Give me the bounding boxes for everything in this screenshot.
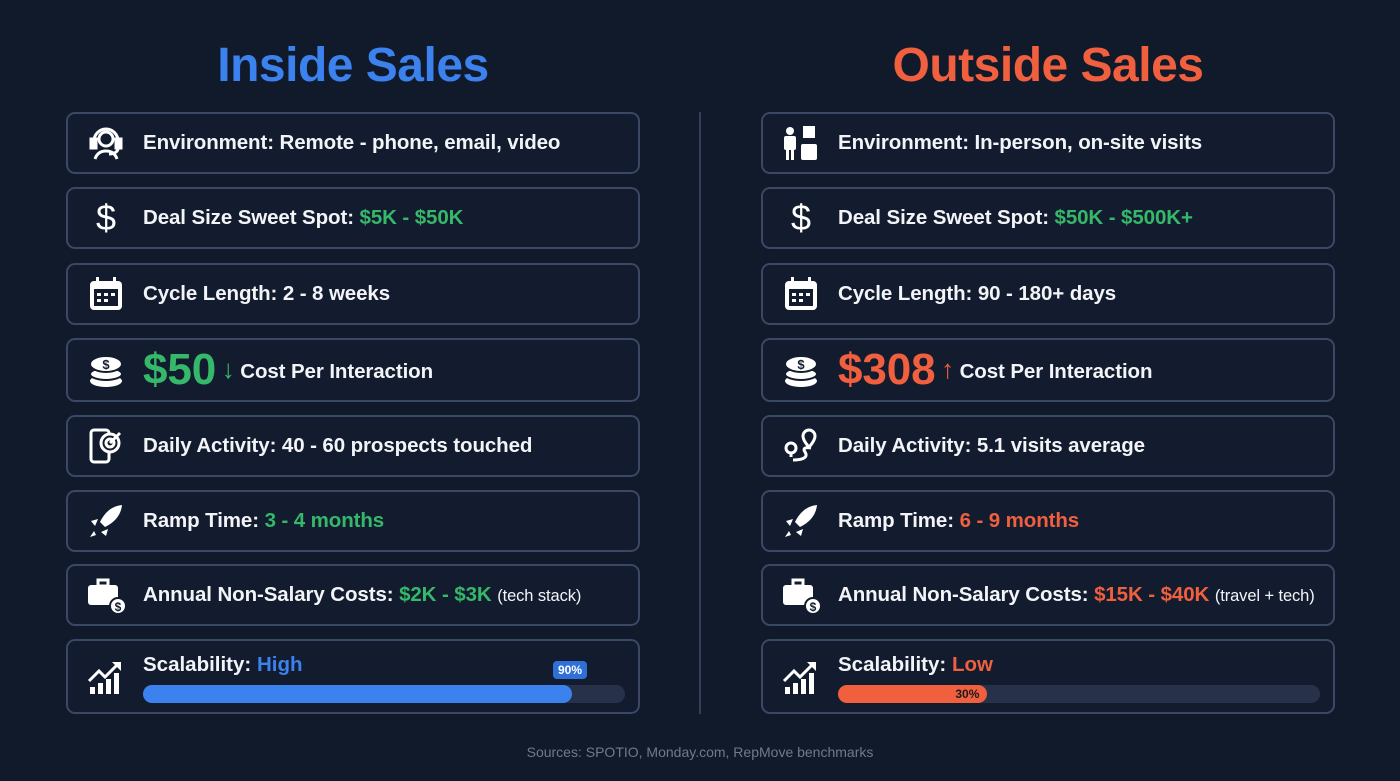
icon: briefcase bbox=[783, 578, 820, 614]
text: Ramp Time: 3 - 4 months bbox=[143, 509, 384, 532]
card: daily activity bbox=[761, 415, 1335, 477]
divider bbox=[699, 112, 701, 714]
label: Scalability: Low bbox=[838, 653, 993, 676]
icon: headset bbox=[90, 128, 122, 160]
card: environment bbox=[761, 112, 1335, 174]
label: Scalability: High bbox=[143, 653, 302, 676]
icon: briefcase: $ bbox=[810, 600, 817, 614]
card: environment bbox=[66, 112, 640, 174]
text: $50 ↓ Cost Per Interaction bbox=[143, 345, 433, 394]
text: Deal Size Sweet Spot: $5K - $50K bbox=[143, 206, 463, 229]
icon: briefcase bbox=[88, 578, 125, 614]
icon: briefcase: $ bbox=[115, 600, 122, 614]
text: Daily Activity: 40 - 60 prospects touched bbox=[143, 434, 532, 457]
title: outside sales: Outside Sales bbox=[893, 39, 1203, 92]
icon: calendar bbox=[785, 277, 817, 310]
icon: route pin bbox=[784, 428, 816, 462]
card: costs bbox=[66, 564, 640, 626]
card: deal size bbox=[761, 187, 1335, 249]
text: Daily Activity: 5.1 visits average bbox=[838, 434, 1145, 457]
panel: outside sales bbox=[761, 112, 1335, 714]
icon: rocket bbox=[90, 505, 122, 537]
card: daily activity bbox=[66, 415, 640, 477]
text: Environment: Remote - phone, email, video bbox=[143, 131, 560, 154]
card: ramp bbox=[66, 490, 640, 552]
text: Deal Size Sweet Spot: $50K - $500K+ bbox=[838, 206, 1193, 229]
card: scalability bbox=[66, 639, 640, 714]
text: Cycle Length: 2 - 8 weeks bbox=[143, 282, 390, 305]
icon: coins bbox=[90, 357, 122, 387]
card: deal size bbox=[66, 187, 640, 249]
bar 30% bbox=[838, 685, 1320, 703]
icon: rocket bbox=[785, 505, 817, 537]
icon: dollar: $ bbox=[791, 198, 811, 238]
icon: calendar bbox=[90, 277, 122, 310]
card: ramp bbox=[761, 490, 1335, 552]
text: Annual Non-Salary Costs: $2K - $3K (tech stack) bbox=[143, 583, 581, 606]
sources footer: Sources: SPOTIO, Monday.com, RepMove benchmarks bbox=[527, 744, 873, 760]
text: Cycle Length: 90 - 180+ days bbox=[838, 282, 1116, 305]
text: Ramp Time: 6 - 9 months bbox=[838, 509, 1079, 532]
icon: dollar: $ bbox=[96, 198, 116, 238]
card: cost bbox=[761, 338, 1335, 402]
icon: coins: $ bbox=[102, 357, 110, 372]
text: $308 ↑ Cost Per Interaction bbox=[838, 345, 1152, 394]
card: scalability bbox=[761, 639, 1335, 714]
bar 30%: 30% bbox=[955, 687, 979, 701]
card: cost bbox=[66, 338, 640, 402]
card: cycle bbox=[66, 263, 640, 325]
icon: coins bbox=[785, 357, 817, 387]
icon: growth chart bbox=[783, 662, 816, 694]
title: inside sales: Inside Sales bbox=[217, 39, 489, 92]
bar 90% bbox=[143, 685, 625, 703]
card: scalability: 90% bbox=[558, 663, 582, 677]
icon: traveler bbox=[784, 126, 817, 160]
icon: phone target bbox=[90, 428, 121, 464]
icon: growth chart bbox=[88, 662, 121, 694]
text: Annual Non-Salary Costs: $15K - $40K (travel + tech) bbox=[838, 583, 1315, 606]
icon: coins: $ bbox=[797, 357, 805, 372]
panel: inside sales bbox=[66, 112, 640, 714]
card: cycle bbox=[761, 263, 1335, 325]
card: costs bbox=[761, 564, 1335, 626]
text: Environment: In-person, on-site visits bbox=[838, 131, 1202, 154]
